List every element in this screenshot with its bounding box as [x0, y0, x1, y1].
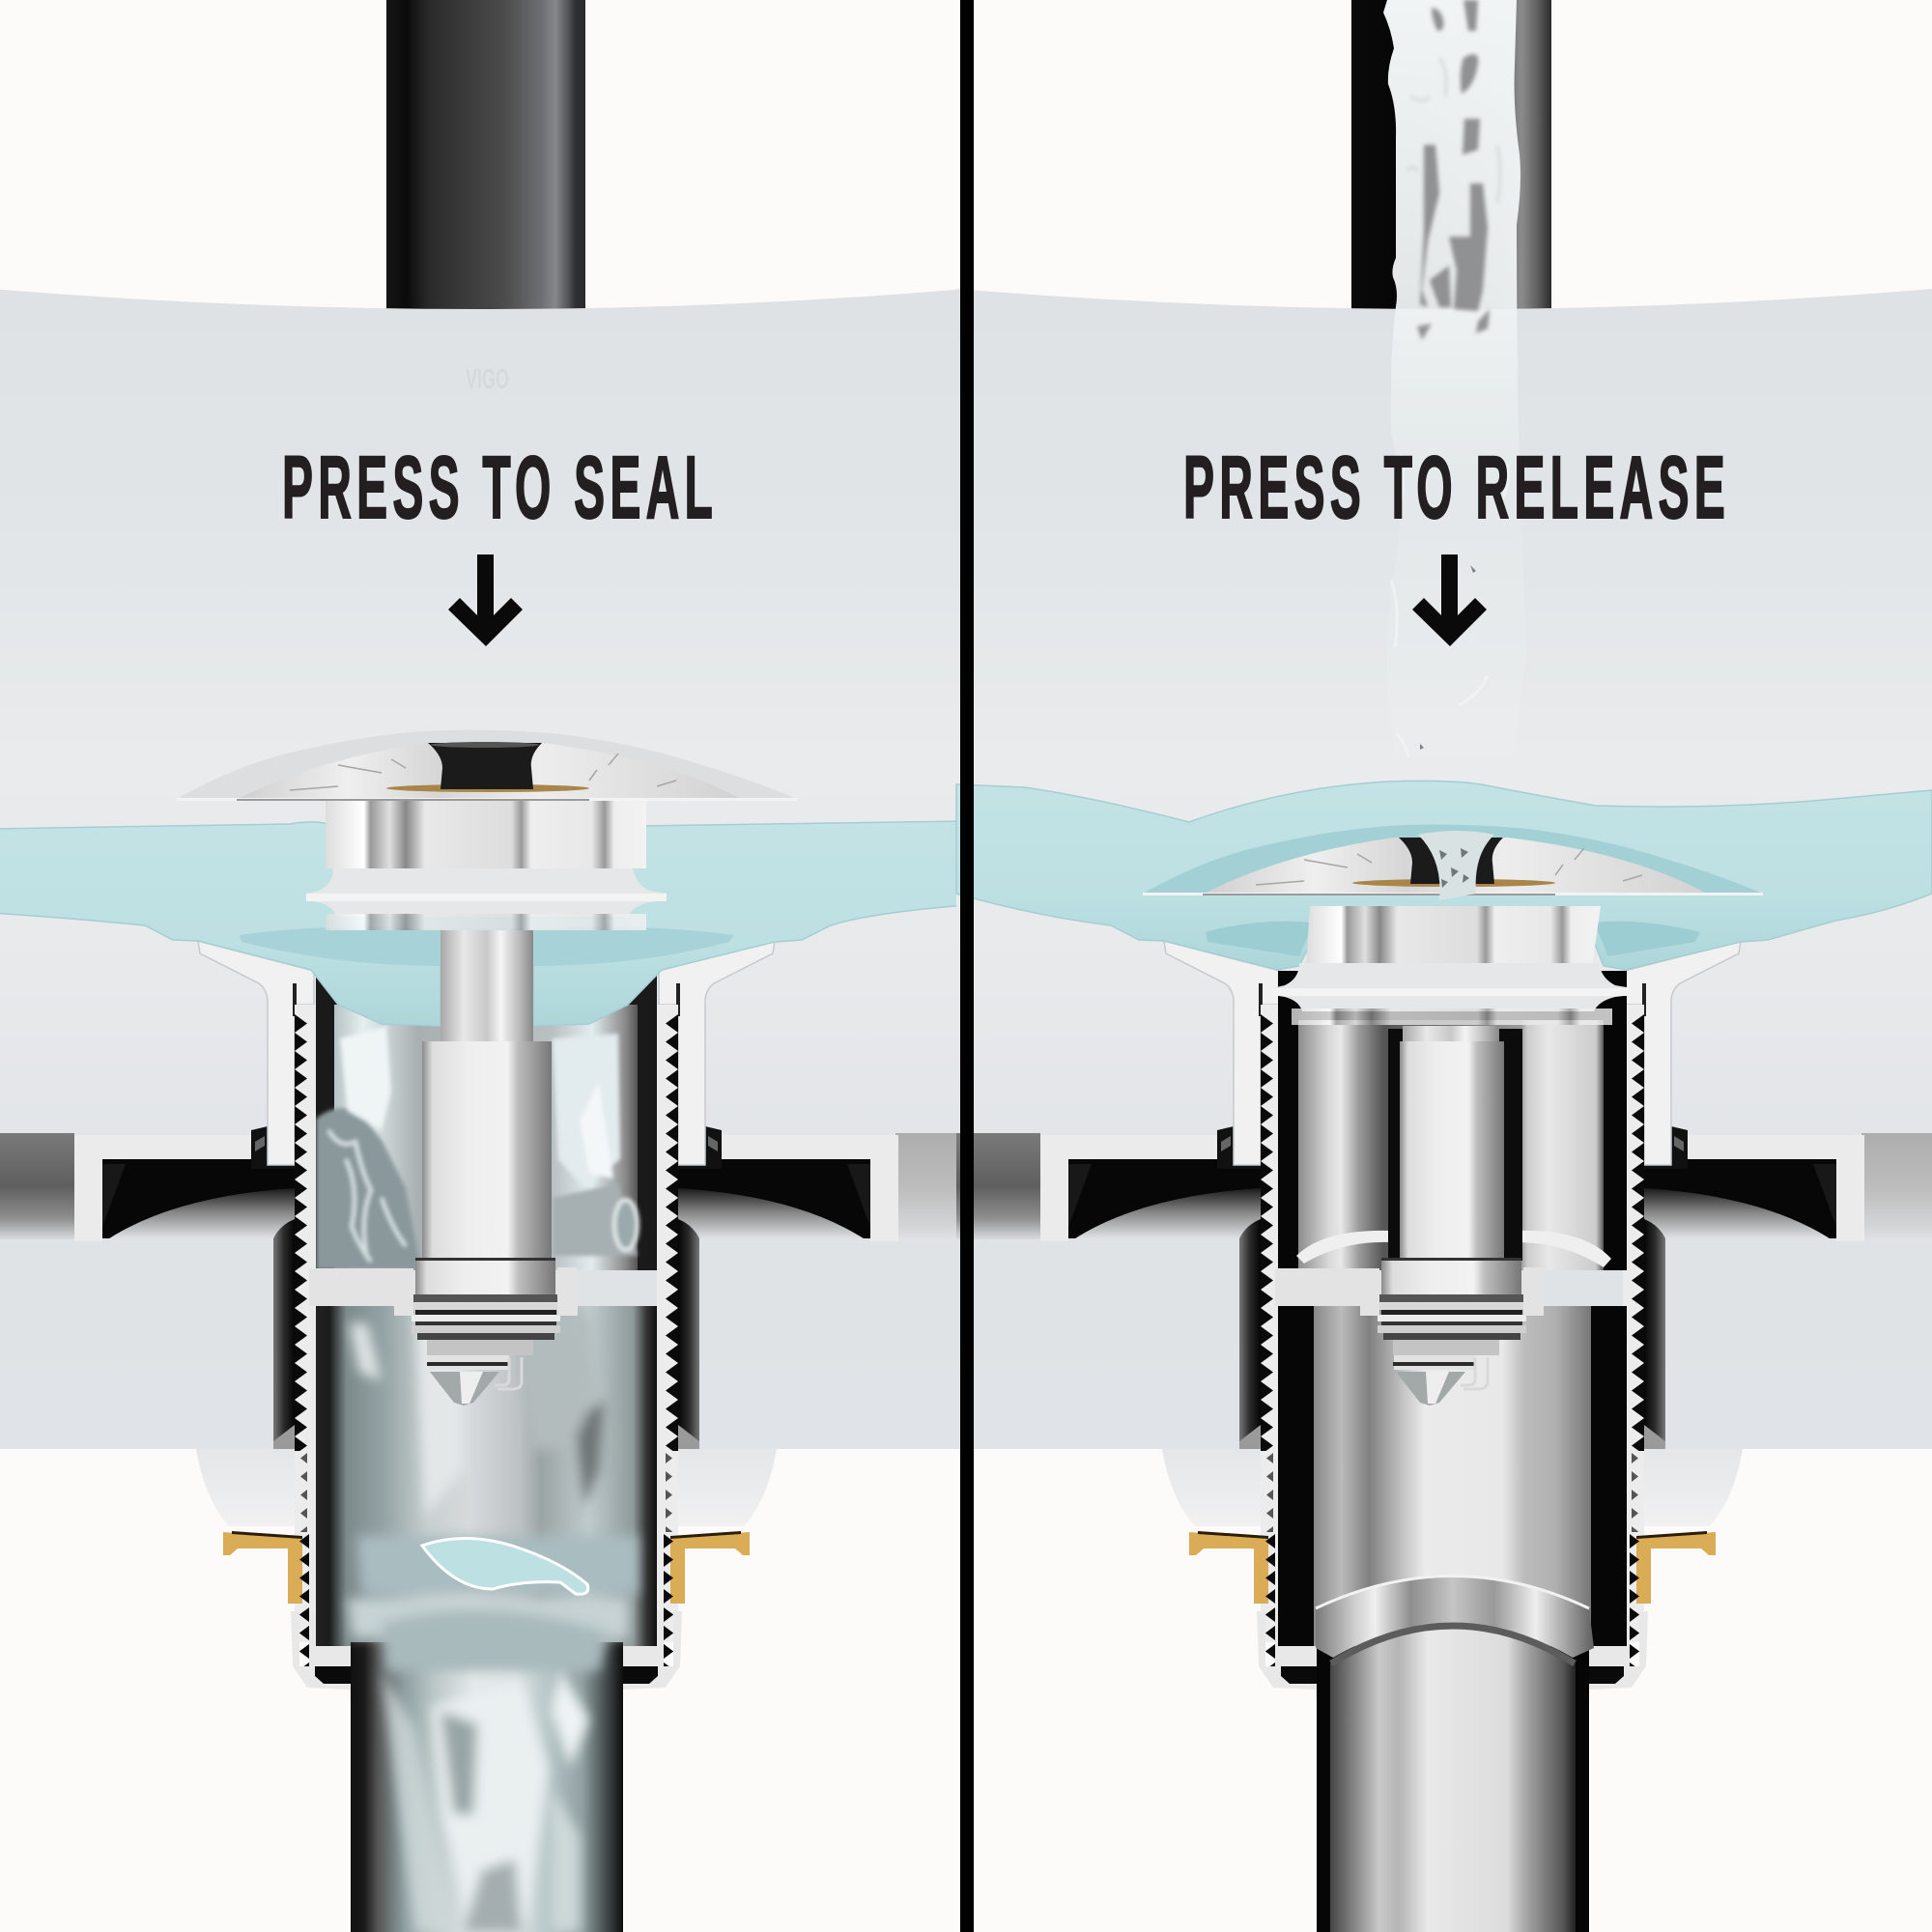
rubber seal: [1272, 963, 1633, 1025]
ledges inside chamber: [1296, 1231, 1611, 1267]
release water surface: [956, 781, 1932, 970]
stopper sleeve: [1388, 1026, 1522, 1261]
standing water surface: [0, 821, 966, 1026]
arrow: down: [1412, 554, 1487, 646]
teal water swirl: [422, 1538, 588, 1594]
brand mark: VIGO: [466, 364, 509, 395]
sink and drain housing cross-section: [0, 289, 966, 1932]
panel: press to release: [956, 0, 1932, 1932]
lower chamber ring: [1316, 1577, 1594, 1658]
rubber seal: [306, 868, 667, 930]
stopper stem: [326, 800, 646, 868]
water pool over basin: [240, 927, 734, 966]
stopper cap: [177, 730, 797, 801]
stopper bolt and crossbar: [309, 1258, 578, 1406]
pipe collar: [1331, 1626, 1575, 1663]
panel: press to seal: [0, 0, 966, 1932]
stopper bolt and crossbar: [1275, 1258, 1544, 1406]
water stream from faucet: [1383, 0, 1526, 763]
cap centre hole: [428, 743, 542, 789]
faucet: [1351, 0, 1551, 309]
divider: [960, 0, 974, 1932]
water entering hole: [1418, 831, 1494, 900]
stopper sleeve: [422, 1041, 552, 1260]
sink and drain housing cross-section: [956, 289, 1932, 1932]
stopper cap under water: [1143, 825, 1763, 900]
stopper shaft: [440, 930, 533, 1041]
gaps in stream: [1406, 0, 1500, 340]
cap centre hole: [1399, 838, 1503, 884]
heading: press to seal: PRESS TO SEAL: [282, 439, 718, 537]
ring highlight: [1316, 1577, 1589, 1608]
stopper chrome body: [1306, 906, 1601, 967]
drain interior filled with water: [316, 971, 657, 1932]
arrow: down: [448, 554, 523, 646]
faint ripples in lower stream: [1391, 454, 1508, 757]
faucet: [386, 0, 585, 309]
water pool over basin: [1206, 922, 1700, 956]
drain interior metal: [1278, 971, 1627, 1932]
